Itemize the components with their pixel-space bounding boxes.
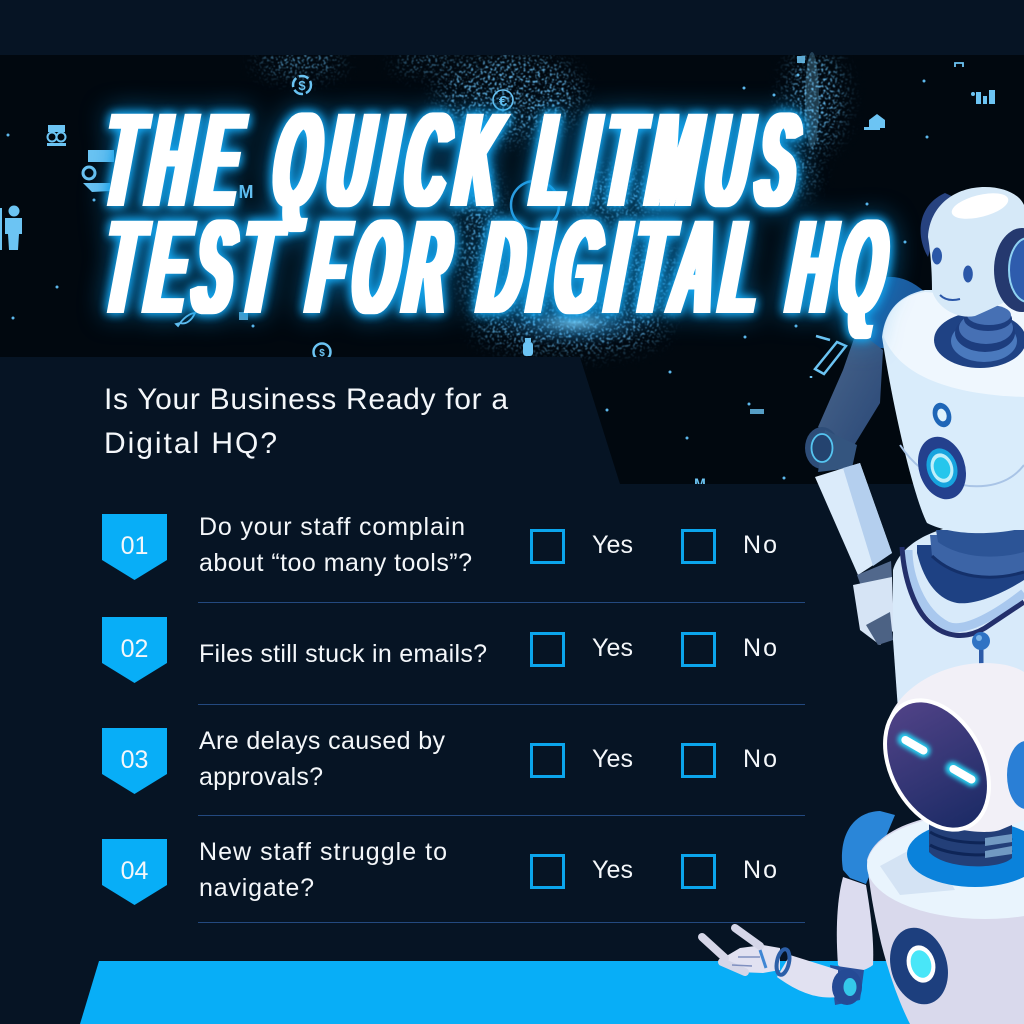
no checkbox 1: No bbox=[743, 531, 777, 559]
number badge 04: 04 bbox=[121, 857, 148, 885]
number badge 01: 01 bbox=[121, 532, 148, 560]
lower content panel bbox=[0, 357, 1024, 1024]
icon: dollar ring bbox=[293, 76, 311, 94]
yes checkbox 1 bbox=[532, 530, 633, 562]
question 4: navigate? bbox=[199, 874, 314, 902]
yes checkbox 4 bbox=[532, 856, 633, 888]
no checkbox 2: No bbox=[743, 634, 777, 662]
number badge 04 bbox=[102, 839, 167, 905]
icon: top square bbox=[797, 56, 805, 63]
question 1 bbox=[199, 513, 472, 577]
yes checkbox 3 bbox=[532, 744, 633, 776]
row 2 bbox=[102, 617, 777, 683]
no checkbox 3: No bbox=[743, 745, 777, 773]
icon: leaf bbox=[176, 313, 195, 326]
number badge 01 bbox=[102, 514, 167, 580]
robot chest lights bbox=[910, 400, 974, 506]
yes checkbox 3: Yes bbox=[592, 745, 633, 773]
icon: top arch bbox=[955, 63, 963, 67]
no checkbox 2 bbox=[682, 634, 777, 666]
bottom blue band bbox=[80, 961, 1024, 1024]
heading: Is Your Business Ready for a bbox=[104, 383, 508, 416]
number badge 02: 02 bbox=[121, 635, 148, 663]
question 4 bbox=[199, 838, 447, 902]
title bbox=[98, 85, 893, 342]
antenna bbox=[972, 632, 990, 682]
icon: small row bbox=[750, 409, 764, 414]
robot body bbox=[867, 812, 1024, 1024]
shoulder and arm bbox=[777, 811, 895, 1005]
icon: M figures: M bbox=[238, 182, 254, 202]
question 1: Do your staff complain bbox=[199, 513, 465, 541]
row 4 bbox=[102, 838, 777, 905]
icon: house in hand bbox=[864, 114, 885, 130]
number badge 03: 03 bbox=[121, 746, 148, 774]
icon: dollar ring: $ bbox=[298, 78, 306, 93]
title: TEST FOR DIGITAL HQ bbox=[98, 192, 893, 342]
yes checkbox 2 bbox=[532, 634, 633, 666]
no checkbox 4: No bbox=[743, 856, 777, 884]
yes checkbox 2: Yes bbox=[592, 634, 633, 662]
icon: tag bbox=[239, 312, 248, 320]
heading bbox=[104, 383, 508, 460]
robot head bbox=[864, 663, 1024, 848]
upper robot bbox=[805, 187, 1024, 710]
question 3: approvals? bbox=[199, 763, 323, 791]
yes checkbox 1: Yes bbox=[592, 531, 633, 559]
robot arm bbox=[805, 277, 925, 645]
icon: euro coin: € bbox=[499, 93, 508, 110]
no checkbox 1 bbox=[682, 530, 777, 562]
no checkbox 4 bbox=[682, 856, 777, 888]
hand bbox=[702, 928, 792, 976]
robot neck bbox=[929, 820, 1012, 866]
heading: Digital HQ? bbox=[104, 427, 277, 460]
chest light bbox=[881, 921, 957, 1011]
no checkbox 3 bbox=[682, 744, 777, 776]
lower robot bbox=[702, 632, 1024, 1024]
robot hip bbox=[893, 525, 1024, 710]
icon: dollar medallion bbox=[314, 344, 330, 360]
icon: large tractor bbox=[83, 150, 114, 192]
icon: euro coin bbox=[493, 90, 513, 110]
question 1: about “too many tools”? bbox=[199, 549, 472, 577]
icon: small tractor bbox=[47, 125, 66, 146]
icon: fuel sign bbox=[811, 336, 846, 378]
background photo: digital particle field bbox=[0, 52, 1024, 485]
question 3: Are delays caused by bbox=[199, 727, 446, 755]
title: THE QUICK LITMUS bbox=[98, 85, 805, 235]
icon: family bbox=[971, 90, 995, 104]
robot torso bbox=[882, 290, 1024, 533]
row 3 bbox=[102, 727, 777, 794]
icon: people bbox=[0, 206, 22, 250]
number badge 02 bbox=[102, 617, 167, 683]
background icons bbox=[0, 56, 995, 491]
yes checkbox 4: Yes bbox=[592, 856, 633, 884]
icon: money bag bbox=[523, 338, 533, 356]
icon: M at panel edge: M bbox=[694, 475, 706, 491]
icon: dollar medallion: $ bbox=[319, 348, 325, 359]
robot head bbox=[921, 187, 1024, 317]
question 4: New staff struggle to bbox=[199, 838, 447, 866]
robot neck bbox=[934, 305, 1024, 368]
question 3 bbox=[199, 727, 446, 791]
row 1 bbox=[102, 513, 777, 580]
number badge 03 bbox=[102, 728, 167, 794]
question 2: Files still stuck in emails? bbox=[199, 640, 487, 668]
icon: target ring bbox=[511, 181, 559, 229]
